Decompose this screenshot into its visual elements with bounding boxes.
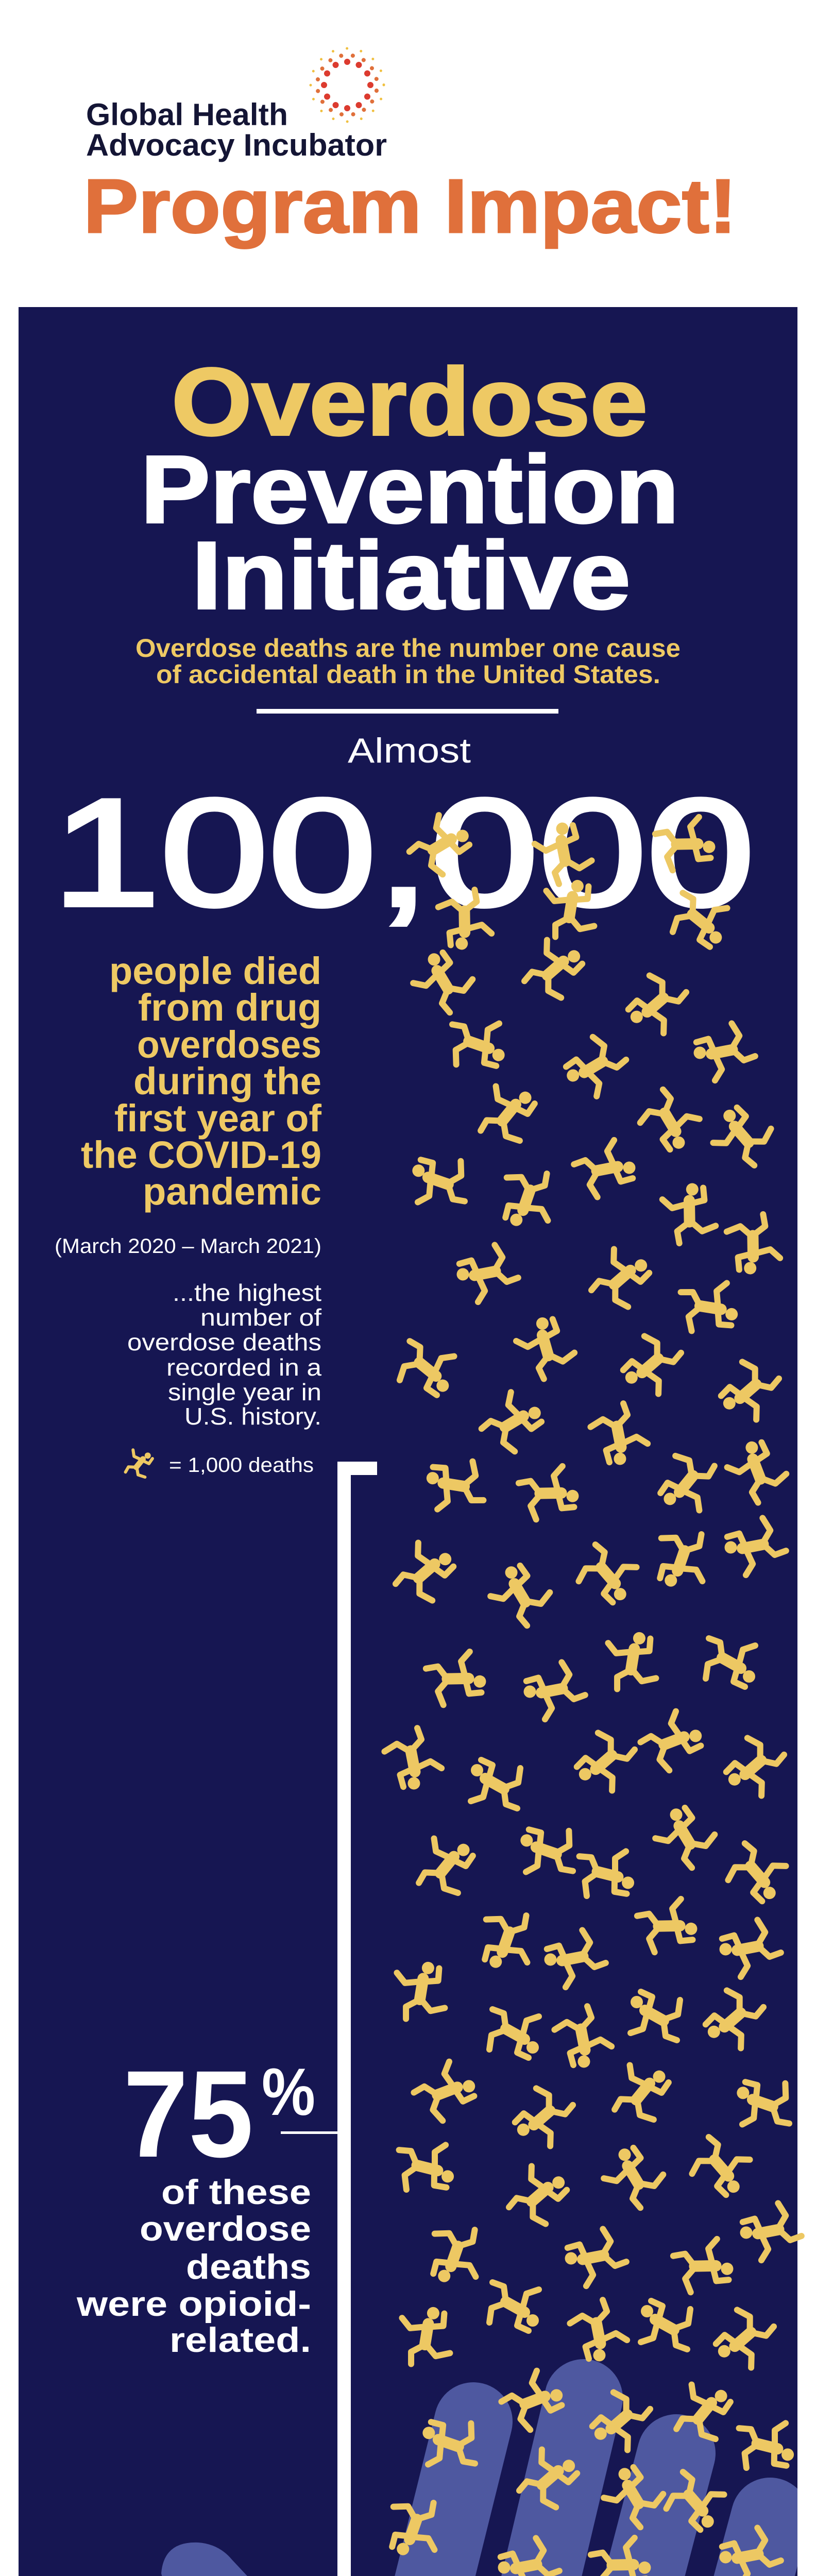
- logo text: [86, 97, 387, 162]
- text: highest number: U.S. history.: [184, 1403, 321, 1430]
- subtitle: Overdose deaths are the number one cause: [135, 634, 681, 663]
- stat: Almost 100,000: 100,000: [52, 767, 755, 938]
- text: highest number: overdose deaths: [127, 1329, 321, 1355]
- falling figures (each = 1,000 deaths): [378, 811, 804, 2576]
- text: highest number: [127, 1279, 321, 1430]
- logo text: Global Health: [86, 97, 288, 132]
- text: opioid-related: overdose: [140, 2209, 311, 2248]
- title: Prevention: [141, 436, 679, 543]
- text: opioid-related: related.: [169, 2320, 311, 2360]
- text: people died: [81, 950, 321, 1213]
- text: people died: from drug: [138, 986, 321, 1029]
- stat: 75%: %: [262, 2054, 315, 2129]
- text: highest number: ...the highest: [173, 1279, 321, 1306]
- stat: 75%: 75: [123, 2045, 253, 2183]
- text: highest number: number of: [200, 1304, 321, 1331]
- date range: (March 2020 – March 2021): [55, 1235, 321, 1258]
- stat: Almost 100,000: Almost: [348, 731, 471, 770]
- text: opioid-related: deaths: [186, 2247, 311, 2286]
- bracket: [344, 1468, 377, 2576]
- text: people died: first year of: [114, 1097, 321, 1140]
- text: people died: people died: [109, 950, 321, 992]
- text: opioid-related: of these: [161, 2173, 311, 2212]
- text: people died: the COVID-19: [81, 1133, 321, 1176]
- text: highest number: recorded in a: [166, 1354, 321, 1381]
- text: opioid-related: were opioid-: [76, 2284, 311, 2324]
- logo: dot ring: [311, 48, 384, 122]
- text: highest number: single year in: [168, 1379, 321, 1405]
- text: people died: pandemic: [143, 1170, 321, 1213]
- text: people died: during the: [133, 1060, 321, 1103]
- subtitle: of accidental death in the United States.: [156, 660, 660, 689]
- heading: Program Impact: Program Impact!: [83, 164, 737, 249]
- logo text: Advocacy Incubator: [86, 128, 387, 162]
- legend: [125, 1449, 314, 1478]
- title: [141, 349, 679, 629]
- title: Overdose: [172, 349, 648, 455]
- stat: Almost 100,000: [52, 731, 755, 938]
- legend: = 1,000 deaths: [169, 1454, 314, 1477]
- subtitle: [135, 634, 681, 689]
- title: Initiative: [192, 522, 631, 629]
- text: opioid-related: [76, 2173, 311, 2360]
- stat: 75%: [123, 2045, 340, 2183]
- text: people died: overdoses: [137, 1023, 321, 1066]
- hand illustration: [142, 2398, 770, 2576]
